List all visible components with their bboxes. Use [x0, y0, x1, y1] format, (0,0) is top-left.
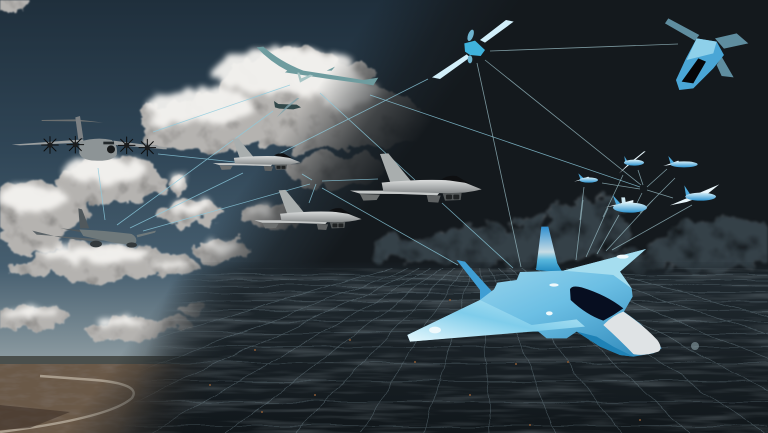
ground landscape: [0, 356, 260, 433]
storm clouds on horizon: [375, 199, 768, 273]
aircraft: small drone: [274, 98, 301, 117]
clouds: [0, 0, 437, 341]
data links: [98, 44, 692, 268]
sea with perspective grid: [136, 263, 768, 433]
far wing: [563, 249, 646, 288]
nose: [603, 312, 661, 355]
underside panel: [577, 332, 633, 357]
surface highlights: [429, 255, 629, 333]
fin, vertical: [536, 227, 563, 273]
fighter, right: [350, 153, 482, 203]
fighter, upper: [213, 138, 300, 171]
fin, left canted: [457, 260, 499, 301]
aircraft: tanker: [32, 208, 156, 248]
satellite: communications: [432, 20, 514, 79]
aircraft: solar high altitude platform: [257, 47, 378, 85]
drone 2: [663, 156, 698, 167]
drone 4: [605, 195, 647, 213]
fighter, lower: [254, 190, 362, 230]
fuselage and wings: [407, 249, 662, 357]
satellite: observation: [665, 18, 748, 90]
drone swarm: [574, 151, 719, 213]
drone 5: [670, 184, 719, 205]
main next generation fighter: [407, 227, 662, 357]
near wing: [407, 300, 585, 342]
drone 1: [619, 151, 646, 173]
aircraft: A400M transport: [12, 116, 167, 161]
drone 3: [574, 173, 598, 183]
canopy: [570, 287, 623, 321]
